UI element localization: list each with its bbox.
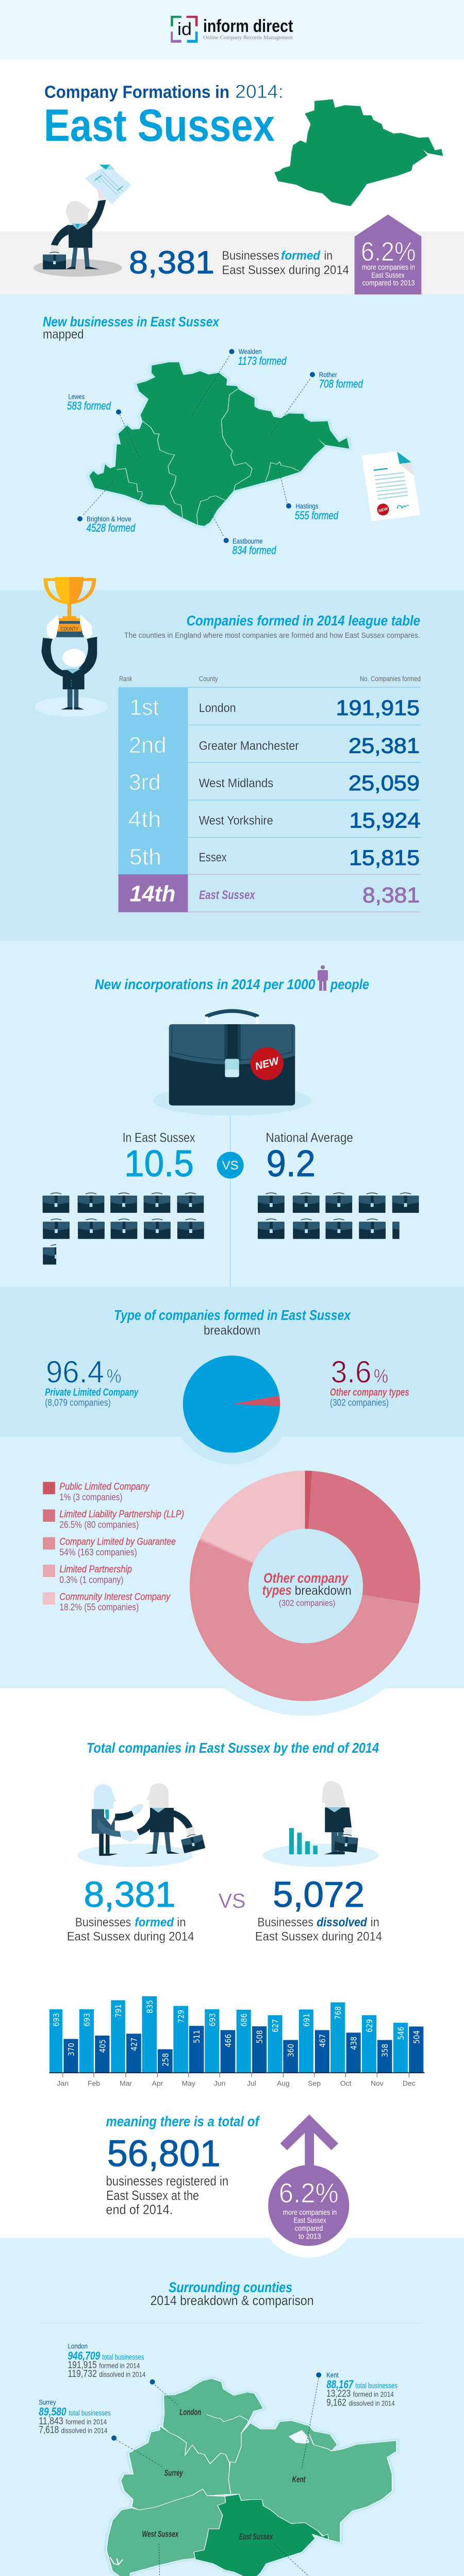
text block: total of 56,801: East Sussex at the bbox=[106, 2188, 199, 2203]
callout: 6.2% more companies: more companies in bbox=[362, 264, 415, 272]
bar chart: monthly formed and dissolved: 504 bbox=[411, 2030, 421, 2044]
bar chart: monthly formed and dissolved: 508 bbox=[255, 2030, 264, 2043]
district: Rother: Rother bbox=[319, 370, 337, 379]
bar chart: monthly formed and dissolved: 405 bbox=[97, 2039, 107, 2053]
legend item: public limited company: 1% (3 companies) bbox=[59, 1492, 122, 1502]
bar chart: monthly formed and dissolved: 629 bbox=[364, 2019, 374, 2032]
table: companies formed league table: 14th bbox=[129, 881, 175, 906]
heading: type of companies bbox=[114, 1307, 351, 1338]
table: companies formed league table: 2nd bbox=[129, 733, 167, 758]
icon: large new briefcase bbox=[153, 1011, 311, 1116]
stat: businesses formed: East Sussex during 2014 bbox=[222, 263, 349, 277]
bar chart: monthly formed and dissolved: 258 bbox=[160, 2053, 170, 2066]
table: companies formed league table: 3rd bbox=[129, 770, 161, 795]
county stats: Surrey: dissolved in 2014 bbox=[61, 2426, 107, 2434]
county stats: Kent: formed in 2014 bbox=[353, 2390, 394, 2398]
legend item: limited liability partnership: 26.5% (80 companies) bbox=[59, 1519, 139, 1530]
bar chart: monthly formed and dissolved: Oct bbox=[340, 2079, 351, 2088]
comparison: incorporations per 1000: In East Sussex bbox=[123, 1131, 195, 1145]
stat: formed vs dissolved: 8,381 bbox=[84, 1874, 175, 1914]
table: companies formed league table: Essex bbox=[199, 851, 227, 865]
stat: formed vs dissolved: East Sussex during 2014 bbox=[255, 1930, 382, 1943]
county names on map: Surrey bbox=[164, 2468, 184, 2478]
bar chart: monthly formed and dissolved: 370 bbox=[66, 2043, 76, 2056]
table: companies formed league table: 5th bbox=[129, 844, 161, 870]
heading: new businesses mapped: mapped bbox=[43, 327, 84, 342]
heading: companies formed league table: The counties in England where most companies are formed and how East Sussex compares. bbox=[124, 631, 420, 640]
bar chart: monthly formed and dissolved: Mar bbox=[120, 2079, 132, 2088]
text block: total of 56,801 bbox=[106, 2113, 260, 2217]
pictogram: East Sussex 10.5 briefcases bbox=[43, 1193, 204, 1265]
bar chart: monthly formed and dissolved: Nov bbox=[371, 2079, 384, 2088]
donut chart: other company types bbox=[190, 1470, 420, 1716]
text block: total of 56,801: meaning there is a total of bbox=[106, 2113, 260, 2129]
illustration: dissolved businesses bbox=[263, 1781, 378, 1867]
bar chart: monthly formed and dissolved: 358 bbox=[380, 2044, 390, 2057]
icon: large new briefcase: NEW bbox=[254, 1055, 281, 1073]
district: Hastings: Hastings bbox=[296, 502, 319, 510]
legend item: company limited by guarantee: Company Limited by Guarantee bbox=[59, 1536, 176, 1547]
callout: arrow with 6.2% growth: 6.2% bbox=[279, 2178, 339, 2209]
bar chart: monthly formed and dissolved: 686 bbox=[239, 2013, 249, 2027]
heading: type of companies: Type of companies formed in East Sussex bbox=[114, 1307, 351, 1323]
pictogram: national 9.2 briefcases bbox=[258, 1193, 419, 1239]
county names on map: Kent bbox=[292, 2475, 306, 2484]
county stats: London: total businesses bbox=[102, 2353, 144, 2362]
map: surrounding counties bbox=[107, 2378, 396, 2576]
stat: formed vs dissolved: Businesses bbox=[75, 1916, 131, 1929]
legend item: community interest company bbox=[43, 1591, 171, 1613]
table: companies formed league table: Greater Manchester bbox=[199, 739, 299, 753]
stat: businesses formed: in bbox=[324, 249, 333, 263]
bar chart: monthly formed and dissolved: 693 bbox=[52, 2013, 61, 2027]
stat: businesses formed: Businesses bbox=[222, 249, 279, 263]
legend item: community interest company: 18.2% (55 companies) bbox=[59, 1602, 139, 1613]
stat: formed vs dissolved: East Sussex during 2014 bbox=[67, 1930, 194, 1943]
bar chart: monthly formed and dissolved: Aug bbox=[277, 2079, 290, 2088]
legend item: limited liability partnership: Limited Liability Partnership (LLP) bbox=[59, 1509, 184, 1520]
district: Lewes: 583 formed bbox=[67, 399, 111, 412]
heading: new incorporations per 1000 people bbox=[95, 965, 369, 992]
legend item: company limited by guarantee: 54% (163 companies) bbox=[59, 1547, 137, 1557]
icon: new company document bbox=[361, 451, 420, 521]
icon: new company document: NEW bbox=[378, 506, 389, 513]
legend item: public limited company: Public Limited Company bbox=[59, 1481, 150, 1492]
heading: surrounding counties: Surrounding counties bbox=[169, 2279, 292, 2295]
county names on map: London bbox=[179, 2407, 201, 2417]
bar chart: monthly formed and dissolved: Dec bbox=[403, 2079, 416, 2088]
text block: total of 56,801: businesses registered in bbox=[106, 2173, 228, 2189]
district: Eastbourne: Eastbourne bbox=[233, 537, 263, 545]
bar chart: monthly formed and dissolved: 627 bbox=[270, 2019, 280, 2032]
table: companies formed league table: No. Companies formed bbox=[360, 675, 421, 683]
stat: formed vs dissolved: VS bbox=[219, 1890, 245, 1912]
donut chart: other company types: (302 companies) bbox=[279, 1598, 335, 1608]
bar chart: monthly formed and dissolved: 466 bbox=[223, 2034, 233, 2047]
bar chart: monthly formed and dissolved: 791 bbox=[113, 2004, 123, 2018]
title: Company Formations in bbox=[44, 82, 229, 102]
logo: inform direct: inform direct bbox=[203, 16, 293, 36]
table: companies formed league table: 8,381 bbox=[362, 883, 420, 907]
stat: formed vs dissolved bbox=[67, 1874, 382, 1943]
county stats: London bbox=[68, 2342, 155, 2384]
table: companies formed league table: 191,915 bbox=[336, 696, 420, 720]
table: companies formed league table: East Sussex bbox=[199, 888, 256, 902]
county stats: Kent: total businesses bbox=[355, 2381, 397, 2391]
callout: arrow with 6.2% growth: East Sussex bbox=[294, 2217, 326, 2225]
comparison: incorporations per 1000: National Average bbox=[266, 1131, 353, 1145]
bar chart: monthly formed and dissolved: Apr bbox=[152, 2079, 163, 2088]
table: companies formed league table: 1st bbox=[129, 694, 159, 720]
district: Eastbourne bbox=[224, 537, 276, 556]
table: companies formed league table: London bbox=[199, 701, 236, 715]
illustration: handshake bbox=[77, 1783, 205, 1867]
table: companies formed league table bbox=[119, 675, 421, 912]
stat: other company types: (302 companies) bbox=[330, 1398, 389, 1408]
bar chart: monthly formed and dissolved: May bbox=[181, 2079, 195, 2088]
callout: arrow with 6.2% growth: to 2013 bbox=[299, 2232, 321, 2241]
comparison: incorporations per 1000: VS bbox=[222, 1159, 239, 1173]
heading: new incorporations per 1000 people: people bbox=[330, 976, 369, 992]
county stats: Kent: 9,162 bbox=[326, 2397, 346, 2408]
logo: inform direct: Online Company Records Management bbox=[203, 35, 293, 41]
donut chart: other company types: types bbox=[262, 1583, 292, 1598]
illustration: businessman holding document bbox=[34, 164, 131, 277]
stat: formed vs dissolved: in bbox=[177, 1916, 186, 1929]
district: Wealden bbox=[229, 347, 287, 367]
stat: private limited company: Private Limited Company bbox=[45, 1387, 139, 1398]
bar chart: monthly formed and dissolved: 693 bbox=[82, 2013, 92, 2027]
stat: private limited company bbox=[45, 1355, 139, 1408]
bar chart: monthly formed and dissolved: 691 bbox=[302, 2013, 311, 2027]
district: Eastbourne: 834 formed bbox=[233, 544, 276, 556]
district: Rother bbox=[310, 370, 363, 391]
stat: formed vs dissolved: formed bbox=[135, 1916, 174, 1929]
comparison: incorporations per 1000 bbox=[123, 1116, 353, 1287]
illustration: person lifting county trophy: COUNTY bbox=[61, 626, 78, 632]
heading: companies formed league table bbox=[124, 613, 420, 640]
donut chart: other company types: breakdown bbox=[295, 1584, 352, 1598]
county stats: Surrey: 89,580 bbox=[39, 2405, 67, 2418]
callout: arrow with 6.2% growth: more companies in bbox=[283, 2209, 337, 2217]
callout: 6.2% more companies bbox=[355, 214, 421, 294]
illustration: person lifting county trophy bbox=[35, 577, 108, 717]
table: companies formed league table: 25,059 bbox=[349, 771, 420, 795]
district: Rother: 708 formed bbox=[319, 378, 363, 391]
bar chart: monthly formed and dissolved: 546 bbox=[396, 2027, 406, 2040]
heading: surrounding counties: 2014 breakdown & comparison bbox=[151, 2293, 313, 2308]
county names on map bbox=[142, 2407, 306, 2541]
stat: formed vs dissolved: dissolved bbox=[317, 1916, 368, 1929]
stat: other company types: Other company types bbox=[330, 1387, 409, 1398]
heading: type of companies: breakdown bbox=[204, 1324, 260, 1338]
stat: other company types: 3.6 bbox=[331, 1355, 371, 1389]
heading: new businesses mapped bbox=[43, 314, 220, 342]
county stats: Surrey bbox=[39, 2398, 117, 2441]
county stats: Kent: Kent bbox=[326, 2370, 339, 2379]
bar chart: monthly formed and dissolved: 427 bbox=[129, 2038, 139, 2051]
legend item: public limited company bbox=[43, 1481, 150, 1502]
legend item: company limited by guarantee bbox=[43, 1536, 176, 1557]
legend item: limited partnership: 0.3% (1 company) bbox=[59, 1575, 123, 1585]
county stats: Surrey: Surrey bbox=[39, 2398, 56, 2406]
stat: other company types bbox=[330, 1355, 409, 1408]
logo: inform direct bbox=[171, 16, 293, 43]
table: companies formed league table: 25,381 bbox=[349, 734, 420, 758]
stat: businesses formed: formed bbox=[281, 249, 321, 263]
county stats: London: 946,709 bbox=[68, 2349, 101, 2362]
table: companies formed league table: West Midlands bbox=[199, 776, 273, 790]
heading: total companies: Total companies in East Sussex by the end of 2014 bbox=[87, 1740, 379, 1756]
bar chart: monthly formed and dissolved: 438 bbox=[349, 2037, 359, 2050]
bar chart: monthly formed and dissolved: 511 bbox=[192, 2030, 202, 2043]
bar chart: monthly formed and dissolved: 360 bbox=[286, 2044, 296, 2057]
heading: new incorporations per 1000 people: New incorporations in 2014 per 1000 bbox=[95, 976, 316, 992]
bar chart: monthly formed and dissolved: 693 bbox=[207, 2013, 217, 2027]
map: East Sussex districts bbox=[67, 347, 363, 556]
district: Wealden: Wealden bbox=[239, 347, 262, 355]
stat: businesses formed: 8,381 bbox=[129, 245, 214, 281]
stat: formed vs dissolved: 5,072 bbox=[273, 1874, 364, 1914]
text block: total of 56,801: 56,801 bbox=[107, 2133, 221, 2174]
county stats: Kent: dissolved in 2014 bbox=[349, 2399, 395, 2407]
bar chart: monthly formed and dissolved: Jun bbox=[214, 2079, 225, 2088]
callout: 6.2% more companies: East Sussex bbox=[371, 272, 405, 280]
county stats: Kent: 13,223 bbox=[326, 2388, 351, 2399]
table: companies formed league table: 15,815 bbox=[349, 845, 420, 870]
legend item: limited liability partnership bbox=[43, 1509, 184, 1530]
county names on map: East Sussex bbox=[239, 2532, 273, 2541]
comparison: incorporations per 1000: 9.2 bbox=[267, 1143, 316, 1184]
map: East Sussex outline bbox=[274, 99, 443, 206]
table: companies formed league table: 4th bbox=[128, 807, 161, 832]
bar chart: monthly formed and dissolved bbox=[49, 1996, 425, 2088]
county stats: London: London bbox=[68, 2342, 88, 2350]
callout: 6.2% more companies: compared to 2013 bbox=[362, 279, 415, 287]
bar chart: monthly formed and dissolved: Feb bbox=[88, 2079, 100, 2088]
pie chart: private limited vs other bbox=[181, 1355, 282, 1464]
district: Lewes: Lewes bbox=[69, 393, 85, 401]
logo: inform direct: id bbox=[177, 20, 192, 39]
county stats: Surrey: 11,843 bbox=[39, 2416, 63, 2427]
county stats: London: formed in 2014 bbox=[99, 2361, 140, 2369]
stat: formed vs dissolved: Businesses bbox=[257, 1916, 313, 1929]
callout: 6.2% more companies: 6.2% bbox=[361, 237, 416, 267]
heading: surrounding counties bbox=[151, 2279, 313, 2308]
county names on map: West Sussex bbox=[142, 2529, 179, 2539]
bar chart: monthly formed and dissolved: Jul bbox=[247, 2079, 256, 2088]
heading: new businesses mapped: New businesses in East Sussex bbox=[43, 314, 220, 330]
text block: total of 56,801: end of 2014. bbox=[106, 2202, 173, 2217]
legend item: limited partnership: Limited Partnership bbox=[59, 1564, 132, 1575]
county stats: Surrey: 7,618 bbox=[39, 2425, 59, 2435]
table: companies formed league table: 15,924 bbox=[350, 808, 421, 833]
callout: arrow with 6.2% growth bbox=[268, 2114, 349, 2258]
bar chart: monthly formed and dissolved: 768 bbox=[333, 2006, 343, 2020]
table: companies formed league table: County bbox=[199, 675, 218, 683]
stat: other company types: % bbox=[374, 1366, 388, 1387]
county stats: London: 119,732 bbox=[68, 2369, 97, 2379]
legend: other company types bbox=[43, 1481, 184, 1613]
county stats: Surrey: formed in 2014 bbox=[65, 2417, 107, 2426]
legend item: community interest company: Community Interest Company bbox=[59, 1591, 171, 1602]
district: Brighton and Hove: Brighton & Hove bbox=[87, 515, 131, 523]
stat: private limited company: 96.4 bbox=[46, 1355, 104, 1389]
table: companies formed league table: Rank bbox=[119, 675, 132, 683]
county stats: London: 191,915 bbox=[68, 2360, 97, 2370]
district: Brighton and Hove: 4528 formed bbox=[87, 521, 136, 534]
stat: private limited company: % bbox=[107, 1366, 121, 1387]
county stats: Kent bbox=[316, 2370, 397, 2408]
district: Lewes bbox=[67, 393, 121, 415]
bar chart: monthly formed and dissolved: Sep bbox=[308, 2079, 321, 2088]
title bbox=[44, 81, 284, 150]
district: Hastings: 555 formed bbox=[295, 509, 339, 522]
county stats: London: dissolved in 2014 bbox=[99, 2370, 145, 2378]
district: Wealden: 1173 formed bbox=[238, 354, 287, 367]
comparison: incorporations per 1000: 10.5 bbox=[124, 1143, 194, 1184]
district: Hastings bbox=[286, 502, 339, 522]
bar chart: monthly formed and dissolved: 835 bbox=[145, 2000, 155, 2013]
stat: businesses formed bbox=[129, 245, 349, 281]
title: 2014: bbox=[235, 81, 284, 102]
callout: arrow with 6.2% growth: compared bbox=[295, 2225, 323, 2233]
district: Brighton and Hove bbox=[77, 515, 136, 534]
donut chart: other company types: Other company bbox=[263, 1570, 349, 1586]
heading: companies formed league table: Companies formed in 2014 league table bbox=[187, 613, 420, 629]
bar chart: monthly formed and dissolved: Jan bbox=[57, 2079, 69, 2088]
bar chart: monthly formed and dissolved: 467 bbox=[318, 2034, 327, 2047]
bar chart: monthly formed and dissolved: 729 bbox=[176, 2010, 186, 2023]
county stats: Kent: 88,167 bbox=[326, 2378, 354, 2391]
stat: private limited company: (8,079 companies) bbox=[45, 1398, 111, 1408]
table: companies formed league table: West Yorkshire bbox=[199, 814, 273, 827]
title: East Sussex bbox=[44, 100, 275, 150]
stat: formed vs dissolved: in bbox=[371, 1916, 379, 1929]
legend item: limited partnership bbox=[43, 1564, 132, 1585]
county stats: Surrey: total businesses bbox=[69, 2409, 111, 2418]
